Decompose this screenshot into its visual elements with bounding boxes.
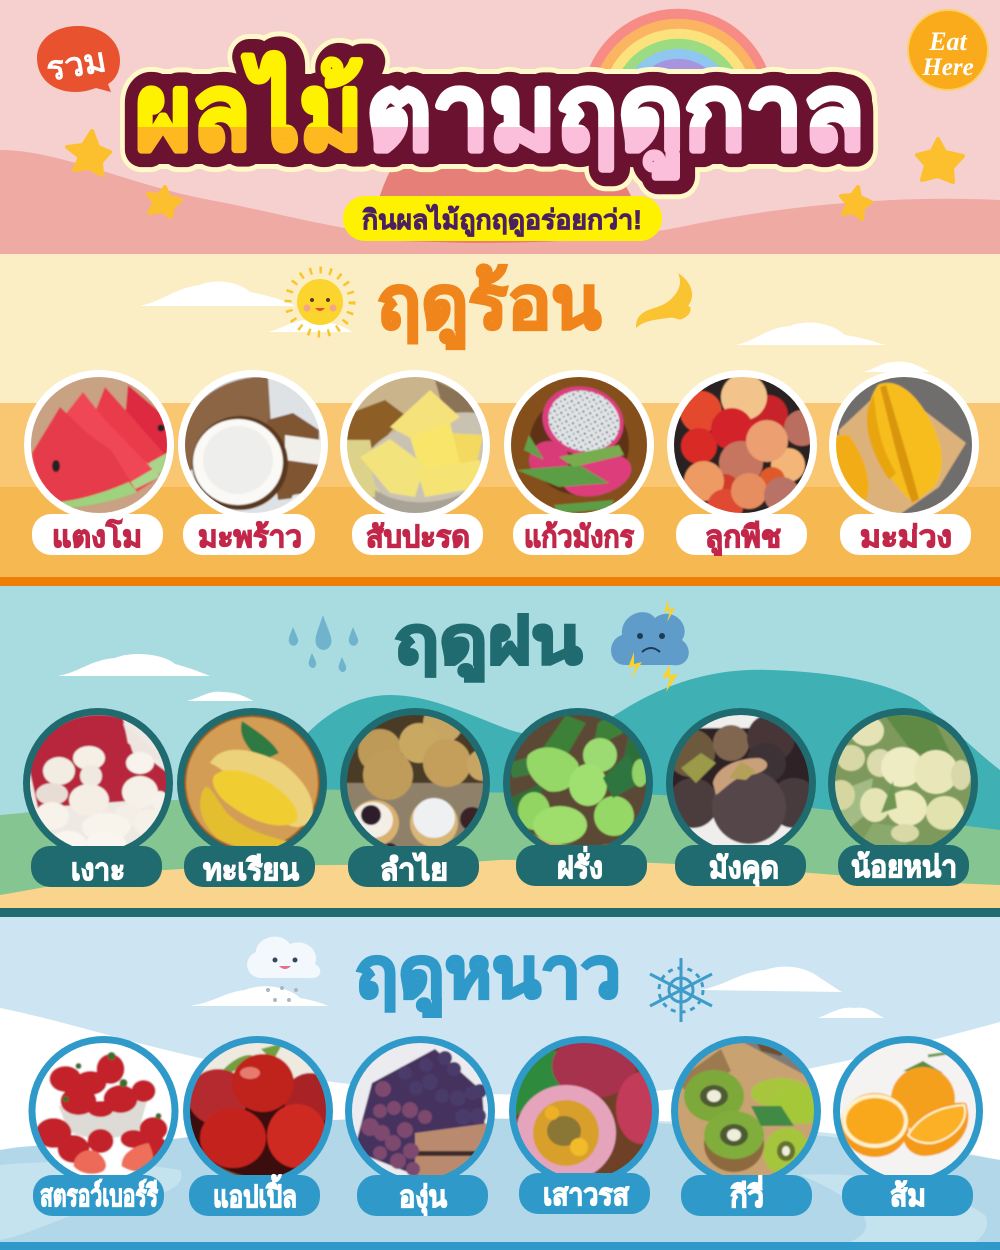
subtitle pill: กินผลไม้ถูกฤดูอร่อยกว่า! — [362, 204, 642, 237]
icon: rain drops — [289, 615, 358, 672]
heading: rainy: ฤดูฝน — [394, 603, 582, 682]
labels: rainy fruits: ทะเรียน — [203, 854, 299, 887]
panel: rainy — [0, 586, 1000, 917]
panel: summer — [0, 254, 1000, 586]
labels: winter fruits — [33, 1173, 973, 1216]
fruit: passion fruit — [509, 1036, 659, 1173]
labels: summer fruits: มะพร้าว — [198, 521, 302, 554]
icon: snow cloud — [247, 937, 320, 1002]
header background — [0, 0, 1000, 254]
summer background — [0, 254, 1000, 586]
fruit: rambutan — [23, 708, 173, 858]
fruit: peach — [667, 370, 820, 525]
panel: header — [0, 0, 1000, 254]
main title: ผลไม้ตามฤดูกาล — [135, 52, 865, 179]
main title: ผลไม้ตามฤดูกาล — [135, 52, 865, 179]
heading: winter: ฤดูหนาว — [355, 934, 621, 1017]
icon: rain cloud — [611, 600, 689, 692]
fruit: watermelon — [24, 370, 174, 520]
fruit: durian — [177, 708, 327, 858]
labels: rainy fruits — [31, 845, 969, 887]
labels: summer fruits: ลูกพีช — [705, 521, 781, 556]
fruit: custard apple — [827, 708, 978, 858]
header hills — [0, 150, 1000, 254]
fruit: guava — [503, 708, 653, 858]
fruit: orange — [833, 1036, 983, 1186]
labels: summer fruits: มะม่วง — [860, 521, 952, 554]
labels: summer fruits — [32, 514, 971, 556]
fruit: dragon fruit — [504, 370, 654, 520]
logo: Eat Here — [908, 10, 988, 90]
main title: ตามฤดูกาล — [366, 54, 865, 179]
icon: snowflake — [650, 958, 712, 1022]
labels: winter fruits: ส้ม — [890, 1180, 926, 1213]
fruit: coconut — [178, 370, 328, 520]
panel: winter — [0, 917, 1000, 1250]
speech bubble: รวม — [37, 26, 120, 92]
labels: rainy fruits: ฝรั่ง — [557, 846, 603, 885]
labels: winter fruits: เสาวรส — [543, 1179, 630, 1212]
rainy background — [0, 586, 1000, 917]
fruit: mangosteen — [666, 708, 816, 845]
icon: wind swirl — [636, 273, 692, 328]
logo: Eat Here: Eat — [928, 27, 968, 56]
labels: rainy fruits: น้อยหน่า — [851, 851, 957, 884]
main title: ผลไม้ — [135, 52, 363, 172]
heading: summer: ฤดูร้อน — [377, 261, 601, 349]
fruit: grape — [345, 1036, 495, 1186]
labels: summer fruits: แตงโม — [52, 518, 142, 554]
icon: sun — [288, 270, 352, 334]
labels: rainy fruits: ลำไย — [380, 852, 448, 887]
winter background — [0, 917, 1000, 1250]
stars — [67, 131, 963, 219]
rainbow — [587, 14, 769, 105]
fruit: strawberry — [28, 1036, 178, 1186]
labels: rainy fruits: มังคุด — [709, 852, 779, 887]
labels: summer fruits: แก้วมังกร — [524, 521, 634, 554]
labels: summer fruits: สับปะรด — [366, 521, 470, 554]
fruit: apple — [183, 1036, 336, 1186]
fruit: kiwi — [671, 1036, 821, 1175]
fruit: mango — [829, 370, 979, 520]
logo: Eat Here: Here — [921, 54, 974, 81]
labels: winter fruits: องุ่น — [399, 1181, 447, 1216]
labels: winter fruits: แอปเปิ้ล — [213, 1174, 297, 1214]
speech bubble: รวม: รวม — [43, 41, 109, 89]
labels: winter fruits: สตรอว์เบอร์รี — [40, 1179, 158, 1213]
labels: winter fruits: กีวี่ — [730, 1175, 764, 1214]
fruit: longan — [340, 708, 490, 846]
labels: rainy fruits: เงาะ — [71, 854, 125, 887]
fruit: pineapple — [340, 370, 490, 520]
subtitle pill — [343, 196, 662, 241]
